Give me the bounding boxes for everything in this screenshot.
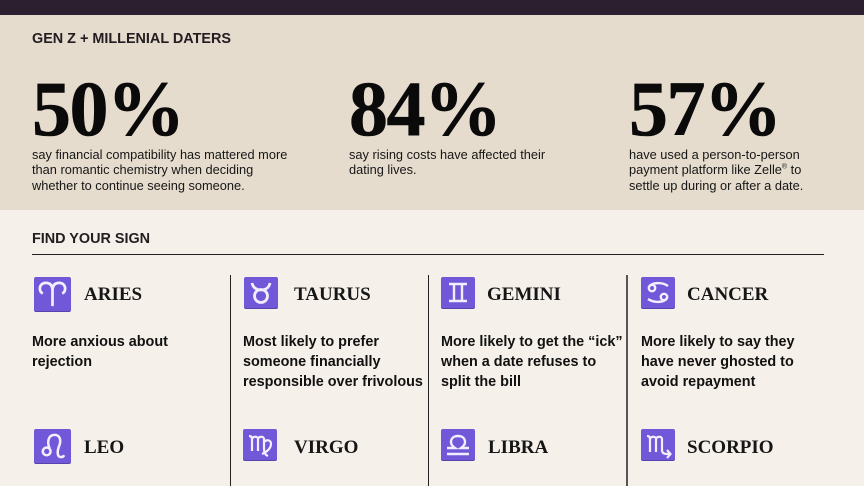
sign text: aries (32, 334, 168, 370)
stat text: 50 percent: say financial compatibility has mattered more (32, 147, 287, 162)
heading: find your sign: FIND YOUR SIGN (32, 231, 150, 247)
sign text: taurus: responsible over frivolous (243, 374, 423, 390)
sign name: cancer: CANCER (687, 284, 768, 305)
sign text: taurus: Most likely to prefer (243, 334, 379, 350)
column divider 1 (230, 275, 231, 486)
stat: 50 percent: 50% (32, 65, 184, 152)
sign name: virgo: VIRGO (294, 437, 358, 458)
icon: aries (34, 277, 71, 312)
sign text: cancer: More likely to say they (641, 334, 795, 350)
stat text: 50 percent: than romantic chemistry when deciding (32, 162, 253, 177)
sign name: leo: LEO (84, 437, 124, 458)
sign name: gemini: GEMINI (487, 284, 561, 305)
stat text: 50 percent (32, 147, 287, 193)
sign text: gemini: split the bill (441, 374, 521, 390)
sign text: gemini: when a date refuses to (441, 354, 596, 370)
column divider 2 (428, 275, 429, 486)
heading: gen z and millennial daters: GEN Z + MILLENIAL DATERS (32, 31, 231, 47)
sign text: cancer: have never ghosted to (641, 354, 794, 370)
stat: 57 percent: 57% (629, 65, 780, 152)
sign name: scorpio: SCORPIO (687, 437, 774, 458)
icon: gemini (441, 277, 475, 309)
icon: virgo (243, 429, 277, 461)
sign text: cancer: avoid repayment (641, 374, 755, 390)
sign text: gemini (441, 334, 623, 390)
heading rule (32, 254, 824, 255)
stat text: 57 percent (629, 147, 803, 193)
sign text: aries: rejection (32, 354, 92, 370)
sign text: aries: More anxious about (32, 334, 168, 350)
sign text: taurus (243, 334, 423, 390)
top bar (0, 0, 864, 15)
stat text: 84 percent (349, 147, 545, 177)
stat text: 84 percent: say rising costs have affected their (349, 147, 545, 162)
stat text: 57 percent: payment platform like Zelle® to (629, 162, 801, 177)
sign text: taurus: someone financially (243, 354, 381, 370)
icon: libra (441, 429, 475, 461)
stat: 84 percent: 84% (349, 65, 500, 152)
panel: gen z and millennial daters stats (0, 15, 864, 210)
icon: taurus (244, 277, 278, 309)
icon: leo (34, 429, 71, 464)
stat text: 57 percent: have used a person-to-person (629, 147, 800, 162)
sign text: cancer (641, 334, 795, 390)
stat text: 84 percent: dating lives. (349, 162, 417, 177)
stat text: 57 percent: settle up during or after a date. (629, 178, 803, 193)
sign name: aries: ARIES (84, 284, 142, 305)
stat text: 50 percent: whether to continue seeing someone. (32, 178, 245, 193)
sign text: gemini: More likely to get the “ick” (441, 334, 623, 350)
sign name: taurus: TAURUS (294, 284, 371, 305)
icon: scorpio (641, 429, 675, 461)
column divider 3 (626, 275, 628, 486)
sign name: libra: LIBRA (488, 437, 548, 458)
icon: cancer (641, 277, 675, 309)
